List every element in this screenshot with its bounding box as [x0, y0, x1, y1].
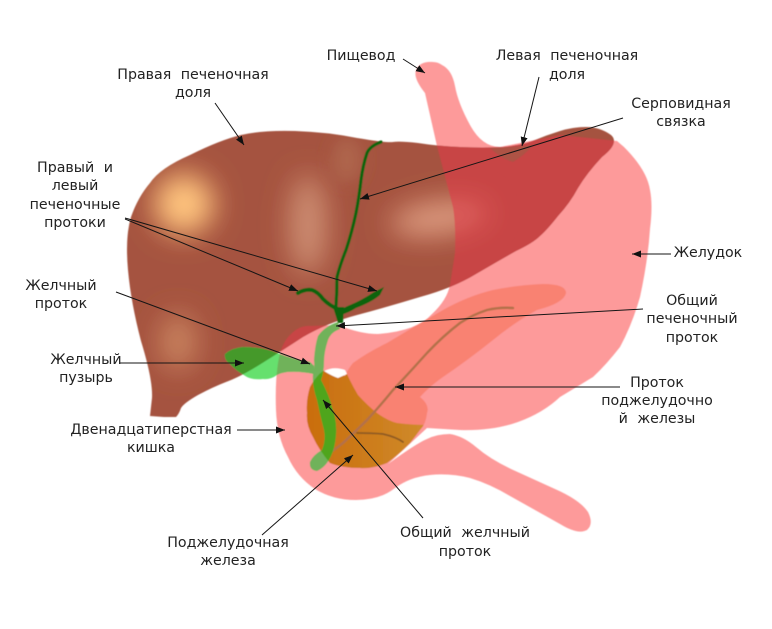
brown patch on left lobe: [490, 145, 533, 162]
pancreatic duct: [323, 308, 513, 457]
label: hepatic ducts: Правый и: [37, 160, 113, 176]
label: falciform ligament: связка: [656, 114, 706, 130]
falciform ligament: [336, 142, 381, 306]
label: stomach: Желудок: [674, 245, 743, 261]
label: right lobe: доля: [175, 85, 211, 101]
label: left lobe: Левая печеночная: [496, 48, 638, 64]
anatomical diagram: liver, bile ducts, stomach, pancreas: [26, 50, 742, 565]
arrow: gallbladder: [120, 362, 244, 364]
arrow: esophagus: [403, 59, 425, 73]
liver over stomach overlap: [280, 134, 614, 351]
label: bile duct: Желчный: [25, 278, 97, 294]
label: hepatic ducts: протоки: [44, 215, 106, 231]
label: pancreatic duct: Проток: [630, 375, 684, 391]
arrow: right hepatic duct: [125, 219, 298, 291]
label: gallbladder: Желчный: [50, 352, 122, 368]
label: common bile duct: Общий желчный: [400, 525, 530, 541]
label: falciform ligament: Серповидная: [631, 96, 731, 112]
label: duodenum: Двенадцатиперстная: [70, 422, 232, 438]
arrow: duodenum: [237, 429, 285, 431]
arrow: pancreatic duct: [395, 386, 620, 388]
label: common hepatic duct: печеночный: [646, 311, 738, 327]
liver: [127, 127, 614, 417]
arrow: common bile duct: [323, 400, 423, 518]
arrow: falciform ligament: [360, 118, 623, 199]
gallbladder: [225, 347, 314, 379]
label: common hepatic duct: проток: [666, 330, 719, 346]
pancreas body: [307, 284, 566, 468]
arrow: bile duct: [116, 292, 310, 364]
liver highlights: [154, 138, 492, 370]
label: esophagus: Пищевод: [327, 48, 396, 64]
arrow: pancreas: [262, 455, 353, 535]
label: hepatic ducts: левый: [52, 178, 98, 194]
pancreas head: [306, 370, 424, 469]
label: duodenum: кишка: [127, 440, 175, 456]
arrow: right lobe: [215, 103, 244, 145]
label: right lobe: Правая печеночная: [117, 67, 269, 83]
label: pancreas: Поджелудочная: [167, 535, 289, 551]
label: common hepatic duct: Общий: [666, 293, 718, 309]
common bile duct: [310, 322, 340, 471]
label: gallbladder: пузырь: [59, 370, 113, 386]
arrow: left lobe: [522, 77, 539, 146]
label: left lobe: доля: [549, 67, 585, 83]
gap above pancreas head: [324, 368, 347, 378]
label: pancreas: железа: [200, 553, 256, 569]
label: bile duct: проток: [35, 296, 88, 312]
arrow: common hepatic duct: [336, 309, 643, 326]
stomach, esophagus and duodenum: [276, 62, 652, 532]
right and left hepatic ducts: [298, 287, 384, 323]
label: hepatic ducts: печеночные: [30, 197, 120, 213]
arrow: left hepatic duct: [125, 218, 377, 291]
label: common bile duct: проток: [439, 544, 492, 560]
label: pancreatic duct: поджелудочно: [601, 393, 713, 409]
label: pancreatic duct: й железы: [619, 411, 695, 427]
arrow: stomach: [632, 253, 671, 255]
